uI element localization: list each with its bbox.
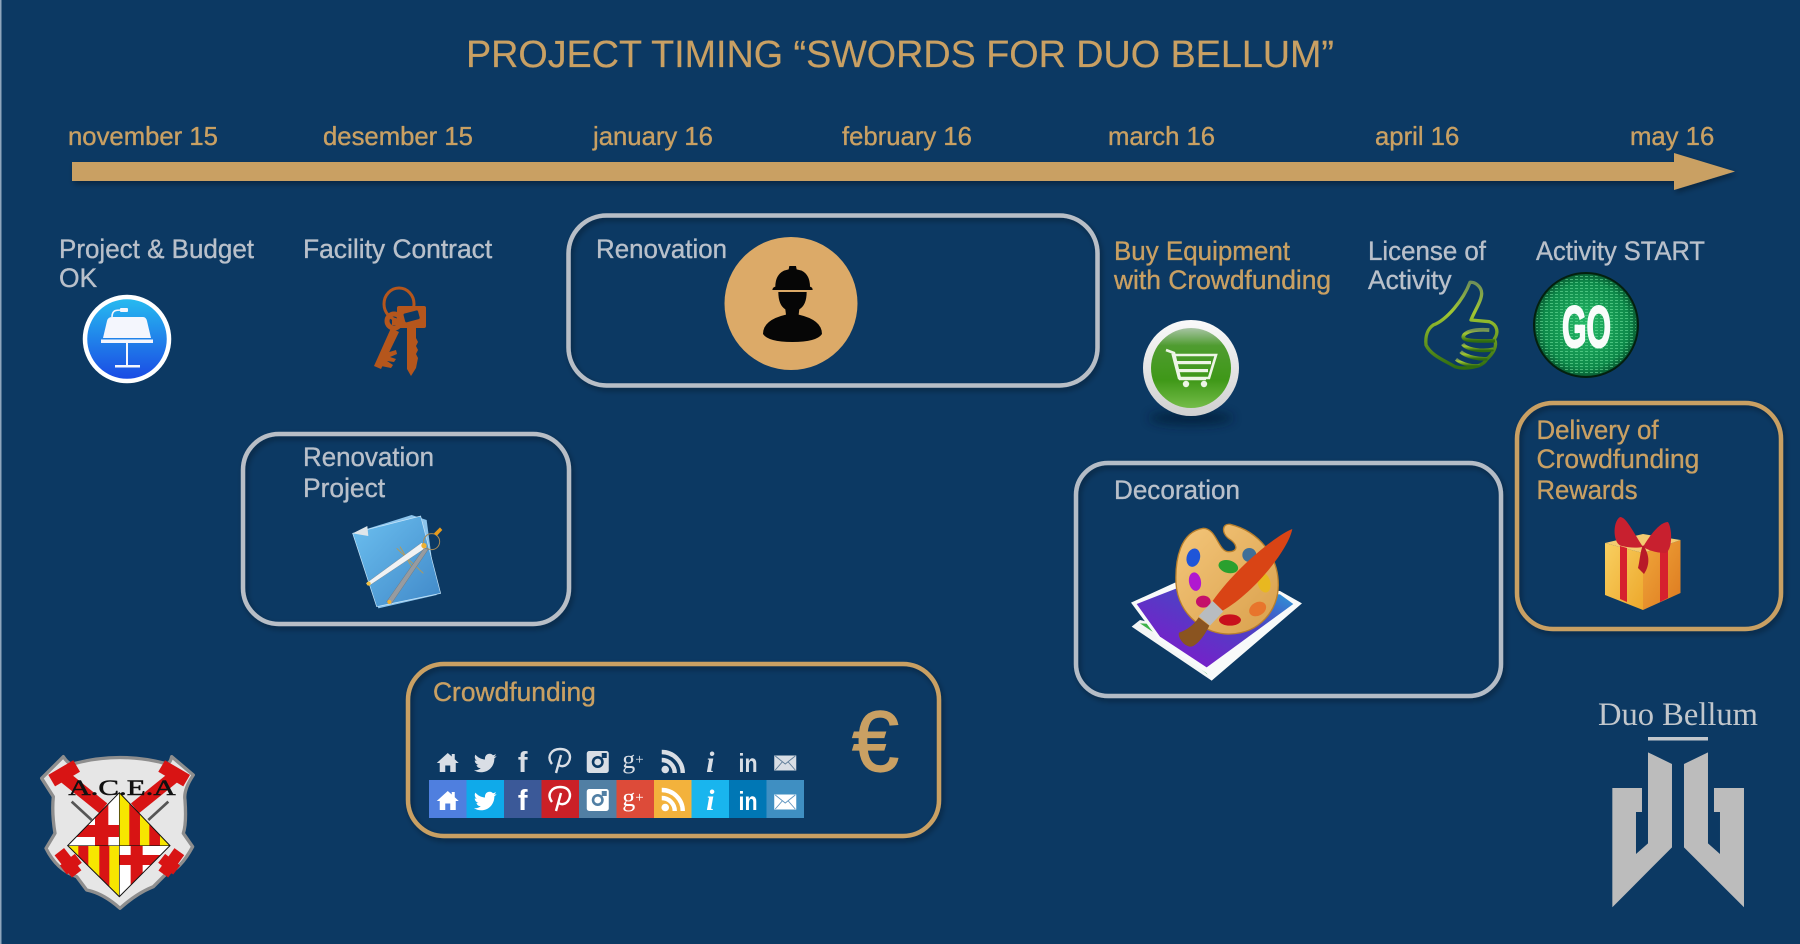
label: Renovation Project: Project xyxy=(303,473,386,503)
label: Crowdfunding: Crowdfunding xyxy=(433,677,596,707)
icon: shopping cart button xyxy=(1143,320,1239,425)
label: Buy Equipment with Crowdfunding: Buy Equipment xyxy=(1114,236,1291,266)
timeline month labels: november 15 xyxy=(68,123,218,151)
timeline month labels: may 16 xyxy=(1630,123,1714,151)
social icons: colored row: in xyxy=(738,786,758,816)
label: License of Activity: Activity xyxy=(1368,265,1452,295)
label: Buy Equipment with Crowdfunding xyxy=(1113,236,1331,295)
timeline month labels: april 16 xyxy=(1375,123,1459,151)
icon: thumbs up xyxy=(1426,282,1497,368)
label: Renovation Project xyxy=(303,442,434,503)
panel: Renovation xyxy=(568,216,1098,386)
icon: keys xyxy=(374,288,426,376)
timeline month labels: january 16 xyxy=(592,123,713,151)
social icons: colored row: f xyxy=(518,785,528,817)
icon: blueprint and compass xyxy=(353,515,442,608)
icon: construction worker xyxy=(724,237,858,370)
label: Renovation Project: Renovation xyxy=(303,442,434,472)
label: Buy Equipment with Crowdfunding: with Crowdfunding xyxy=(1113,265,1331,295)
social icons: colored row xyxy=(429,780,804,818)
icon: euro sign: € xyxy=(852,694,899,790)
timeline month labels: march 16 xyxy=(1108,123,1215,151)
social icons: colored row: + xyxy=(635,790,644,806)
panel: Crowdfunding xyxy=(408,664,939,836)
label: Delivery of Crowdfunding Rewards: Delivery of xyxy=(1536,415,1659,445)
logo: Duo Bellum: Duo Bellum xyxy=(1598,697,1758,733)
icon: GO button: GO xyxy=(1562,295,1611,360)
label: Delivery of Crowdfunding Rewards: Crowdfunding xyxy=(1536,444,1699,474)
icon: GO button xyxy=(1534,273,1638,377)
panel: Renovation Project xyxy=(243,434,569,624)
timeline month labels: desember 15 xyxy=(323,123,473,151)
logo: Duo Bellum xyxy=(1598,697,1758,907)
social icons: colored row: i xyxy=(706,784,715,817)
icon: palette and brush xyxy=(1131,524,1302,681)
social icons: grey row: + xyxy=(635,752,644,768)
label: Delivery of Crowdfunding Rewards: Rewards xyxy=(1536,475,1638,505)
label: Project & Budget OK: Project & Budget xyxy=(59,234,255,264)
logo: A.C.E.A shield xyxy=(42,757,193,908)
timeline month labels xyxy=(68,123,1714,151)
arrow: timeline xyxy=(72,153,1735,190)
label: License of Activity: License of xyxy=(1368,236,1487,266)
label: Project & Budget OK xyxy=(59,234,255,293)
panel: Decoration xyxy=(1076,463,1501,696)
label: Facility Contract: Facility Contract xyxy=(303,234,493,264)
icon: keynote podium xyxy=(85,297,169,381)
label: Decoration: Decoration xyxy=(1114,475,1240,505)
title: PROJECT TIMING “SWORDS FOR DUO BELLUM” xyxy=(466,33,1334,75)
label: Project & Budget OK: OK xyxy=(59,263,98,293)
social icons: grey row xyxy=(437,745,796,779)
label: Delivery of Crowdfunding Rewards xyxy=(1536,415,1699,505)
social icons: colored row: g xyxy=(622,783,635,812)
social icons: grey row: i xyxy=(706,746,715,779)
label: License of Activity xyxy=(1368,236,1487,295)
social icons: grey row: f xyxy=(518,747,528,779)
logo: A.C.E.A shield: A.C.E.A xyxy=(68,775,177,800)
icon: gift box xyxy=(1605,517,1680,610)
social icons: grey row: in xyxy=(738,748,758,778)
label: Activity START: Activity START xyxy=(1536,236,1705,266)
label: Renovation: Renovation xyxy=(596,234,727,264)
panel: Delivery of Crowdfunding Rewards xyxy=(1517,403,1781,629)
timeline month labels: february 16 xyxy=(842,123,972,151)
social icons: grey row: g xyxy=(622,745,635,774)
